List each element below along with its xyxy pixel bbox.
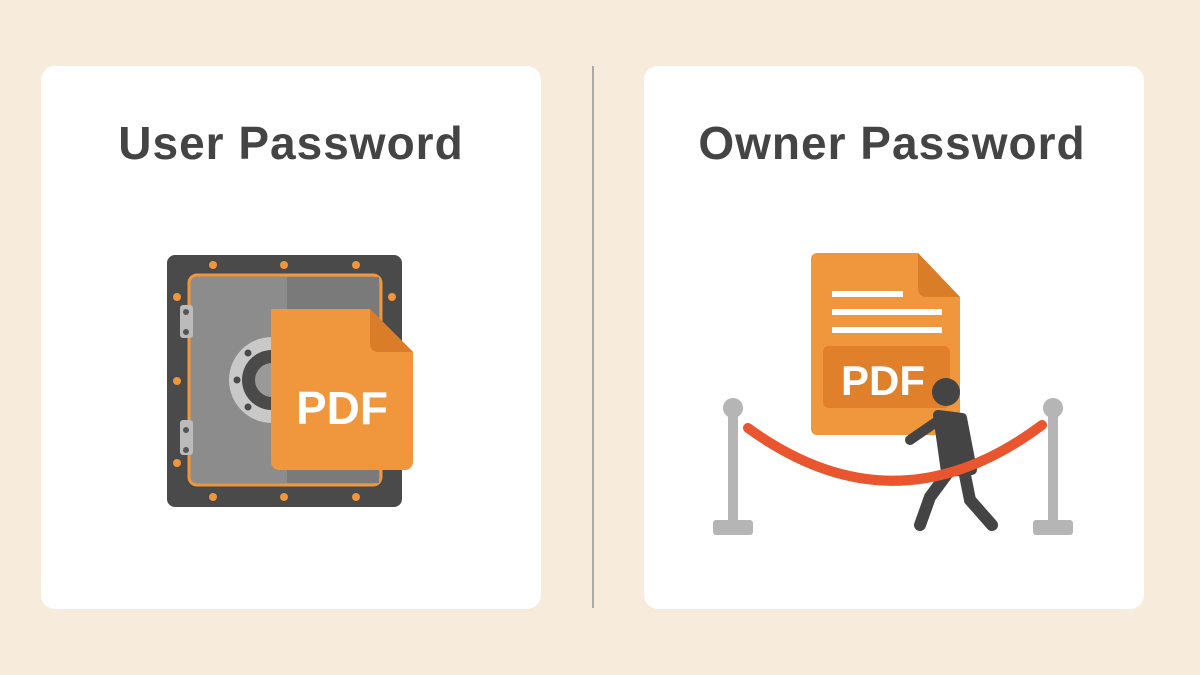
icon: safe with PDF [167, 255, 413, 507]
panel: owner password [644, 66, 1144, 609]
title: Owner Password: Owner Password [698, 117, 1086, 169]
icon: safe with PDF: PDF [296, 382, 388, 434]
icon: PDF behind rope with person: PDF [841, 357, 925, 404]
divider [592, 66, 594, 608]
panel: user password [41, 66, 541, 609]
title: User Password: User Password [118, 117, 464, 169]
icon: PDF behind rope with person [713, 253, 1073, 535]
